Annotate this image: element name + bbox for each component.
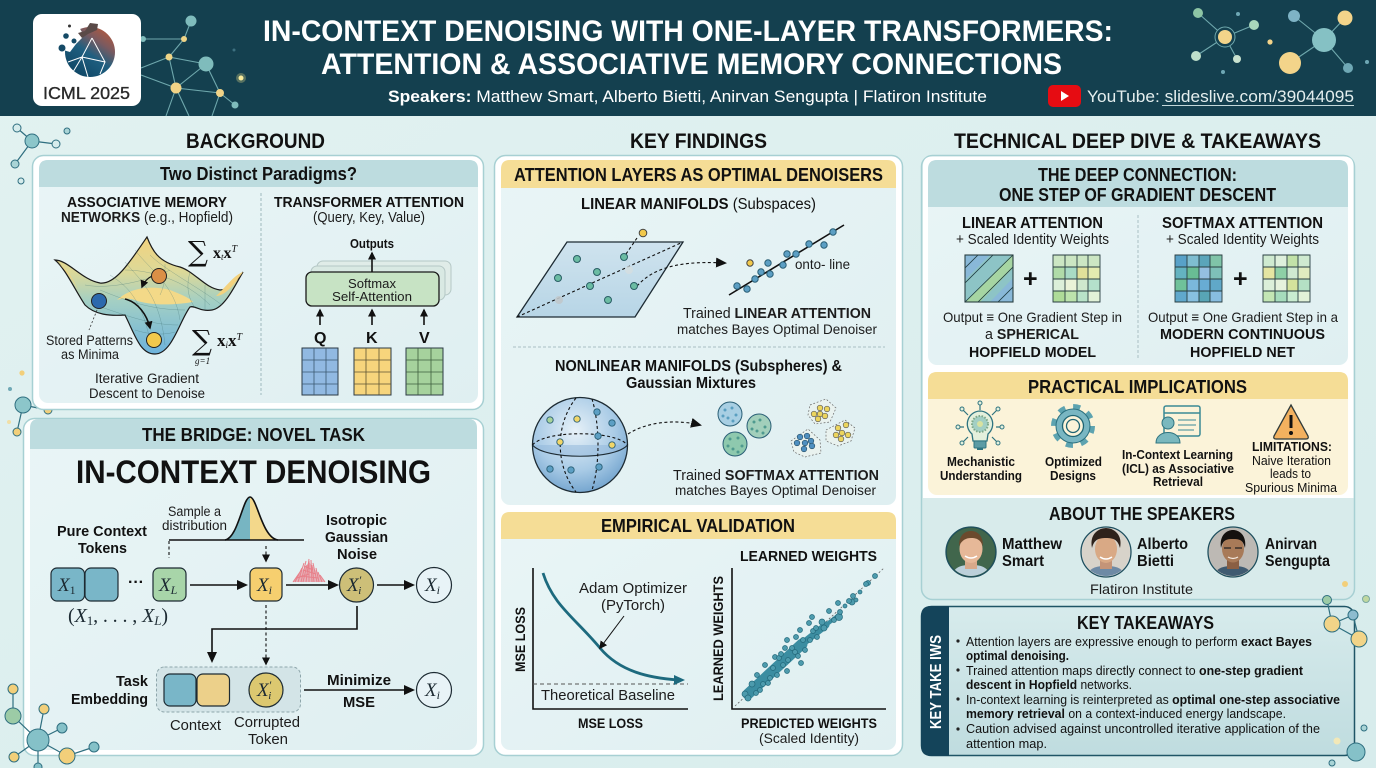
label: in-context learning: [1122, 448, 1234, 489]
formula: sum x x^T: [188, 235, 239, 268]
axis label: predicted weights: [741, 715, 877, 746]
label: gaussian noise: Noise: [337, 547, 377, 563]
formula: token tuple: 1: [87, 613, 93, 628]
label: mechanistic understanding: Mechanistic: [947, 455, 1015, 469]
token row: L: [170, 583, 178, 597]
section heading: deep connection: [999, 165, 1276, 205]
icon: context card: [1156, 406, 1200, 443]
plus sign: +: [1023, 265, 1038, 293]
diagram: self-attention: K: [366, 330, 378, 347]
bullet list: Trained attention maps directly connect to one-step gradient: [966, 663, 1304, 678]
speaker: alberto bietti: Bietti: [1137, 553, 1174, 570]
diagram: gaussian blobs: [718, 402, 771, 456]
output token: X: [425, 680, 437, 701]
icon: youtube: [1048, 85, 1081, 107]
label: pure context tokens: Tokens: [78, 541, 127, 557]
speaker: matthew smart: Matthew: [1002, 536, 1063, 553]
section heading: empirical validation: EMPIRICAL VALIDATION: [601, 516, 795, 536]
affiliation: Flatiron Institute: [1090, 581, 1193, 597]
title: IN-CONTEXT DENOISING WITH ONE-LAYER TRANSFORMERS:: [263, 15, 1113, 48]
header banner: [0, 0, 1376, 116]
label: gaussian noise: [325, 513, 388, 563]
formula: sum x x^T: t: [221, 252, 224, 262]
label: minimize mse: [327, 673, 391, 711]
conference logo: [33, 14, 141, 106]
youtube link: YouTube: slideslive.com/39044095: [1087, 88, 1354, 106]
plus sign: +: [1233, 265, 1248, 293]
caption: sample a distribution: Sample a: [168, 504, 221, 519]
heading: about the speakers: ABOUT THE SPEAKERS: [1049, 504, 1235, 524]
label: limitations: Naive Iteration: [1252, 454, 1331, 468]
chart: learned vs predicted scatter: [711, 549, 886, 746]
formula: sum x x^T: ∑: [188, 235, 208, 268]
matrix K: [354, 348, 391, 395]
axis label: predicted weights: (Scaled Identity): [759, 731, 859, 746]
label: corrupted token: [234, 715, 300, 748]
matrix: identity weights: [1263, 255, 1310, 302]
task embedding tokens: X: [257, 680, 269, 701]
task embedding tokens: [156, 667, 300, 712]
formula: token tuple: X: [142, 605, 154, 627]
bullet list: optimal denoising.: [966, 648, 1069, 663]
label: theoretical baseline: Theoretical Baseline: [541, 688, 675, 704]
diagram: sphere: [532, 398, 700, 492]
column: softmax attention: + Scaled Identity Weights: [1166, 232, 1319, 248]
heading: background: BACKGROUND: [186, 129, 325, 153]
associative memory title: ASSOCIATIVE MEMORY: [67, 195, 227, 211]
label: optimized designs: [1045, 455, 1102, 483]
sub-heading: nonlinear manifolds: Gaussian Mixtures: [626, 375, 756, 392]
sub-heading: nonlinear manifolds: [555, 358, 842, 392]
label: limitations: leads to: [1270, 467, 1311, 481]
caption: softmax attention: Trained SOFTMAX ATTENTION: [673, 468, 879, 484]
diagram: projection onto line: onto- line: [795, 256, 850, 272]
transformer attention title: (Query, Key, Value): [313, 210, 425, 226]
transformer attention title: TRANSFORMER ATTENTION: [274, 195, 464, 211]
caption: linear attention: Trained LINEAR ATTENTION: [683, 306, 871, 322]
label: mechanistic understanding: Understanding: [940, 469, 1022, 483]
panel: key takeaways: [921, 606, 1354, 756]
bullet list: descent in Hopfield networks.: [966, 677, 1132, 692]
label: corrupted token: Token: [248, 732, 288, 748]
decorative network right: [1191, 8, 1369, 74]
label: in-context learning: In-Context Learning: [1122, 448, 1233, 462]
chart: mse loss curve: [513, 568, 688, 731]
caption: linear attention: [677, 306, 877, 337]
formula: sum i=1 x x^T: ∑: [192, 324, 212, 357]
label: minimize mse: MSE: [343, 695, 375, 711]
column: softmax attention: Output ≡ One Gradient Step in a: [1148, 309, 1338, 325]
axis label: predicted weights: PREDICTED WEIGHTS: [741, 715, 877, 731]
speaker: matthew smart: [945, 527, 1063, 580]
diagram: projection onto line: [729, 225, 850, 295]
column: linear attention: Output ≡ One Gradient Step in: [943, 309, 1122, 325]
formula: sum i=1 x x^T: i: [226, 340, 228, 350]
section heading: attention layers: ATTENTION LAYERS AS OPTIMAL DENOISERS: [514, 165, 883, 185]
sub-heading: nonlinear manifolds: NONLINEAR MANIFOLDS (Subspheres) &: [555, 358, 842, 375]
speaker: alberto bietti: Alberto: [1137, 536, 1188, 553]
label: minimize mse: Minimize: [327, 673, 391, 689]
token row: 1: [70, 583, 76, 597]
output token: [416, 672, 452, 708]
task embedding tokens: ′: [269, 678, 272, 692]
caption: stored patterns: Stored Patterns: [46, 333, 133, 348]
token row: [51, 568, 452, 602]
caption: sample a distribution: [162, 504, 227, 533]
section heading: deep connection: ONE STEP OF GRADIENT DESCENT: [999, 185, 1276, 205]
transformer attention title: [274, 195, 464, 226]
heading: technical deep dive: TECHNICAL DEEP DIVE & TAKEAWAYS: [954, 129, 1321, 153]
speaker: anirvan sengupta: Anirvan: [1265, 536, 1317, 553]
speaker: anirvan sengupta: Sengupta: [1265, 553, 1330, 570]
annotation: adam optimizer: [579, 581, 687, 614]
token row: i: [437, 583, 440, 597]
bullet list: Attention layers are expressive enough to perform exact Bayes: [966, 634, 1312, 649]
decorative network right margin: [1322, 581, 1370, 766]
chart title: learned weights: LEARNED WEIGHTS: [740, 549, 877, 565]
panel heading: two paradigms: Two Distinct Paradigms?: [160, 164, 357, 184]
column: softmax attention: SOFTMAX ATTENTION: [1162, 215, 1323, 232]
formula: sum i=1 x x^T: g=1: [195, 356, 210, 366]
formula: token tuple: L: [153, 613, 161, 628]
icon: warning: [1274, 405, 1308, 439]
formula: token tuple: (X: [68, 605, 87, 627]
title: ATTENTION & ASSOCIATIVE MEMORY CONNECTIONS: [321, 48, 1062, 81]
token row: X: [58, 575, 70, 596]
diagram: cluster mixtures: [791, 399, 855, 457]
caption: stored patterns: [46, 333, 133, 362]
diagram: linear subspace plane: [517, 229, 725, 317]
label: task embedding: [71, 674, 149, 708]
caption: stored patterns: as Minima: [61, 347, 119, 362]
label: in-context learning: (ICL) as Associative: [1122, 462, 1234, 476]
column: softmax attention: MODERN CONTINUOUS: [1160, 327, 1325, 343]
bridge heading: THE BRIDGE: NOVEL TASK: [142, 425, 365, 445]
caption: gradient descent: Iterative Gradient: [95, 371, 199, 386]
heading: key findings: KEY FINDINGS: [630, 129, 767, 153]
token row: X: [425, 575, 437, 596]
label: pure context tokens: [57, 524, 147, 557]
decorative network top-left margin: [7, 124, 70, 436]
token row: i: [269, 583, 272, 597]
label: limitations: [1245, 440, 1337, 495]
bullet list: In-context learning is reinterpreted as optimal one-step associative: [966, 692, 1340, 707]
caption: gradient descent: [89, 371, 205, 401]
formula: token tuple: ): [161, 605, 168, 627]
matrix: identity weights: [1053, 255, 1100, 302]
title: [263, 15, 1113, 81]
token row: ′: [359, 573, 362, 587]
speaker: alberto bietti: [1080, 527, 1188, 580]
label: limitations: LIMITATIONS:: [1252, 440, 1332, 454]
column: softmax attention: [1148, 215, 1338, 361]
label: limitations: Spurious Minima: [1245, 481, 1337, 495]
column: linear attention: HOPFIELD MODEL: [969, 345, 1096, 361]
matrix: softmax: [1175, 255, 1222, 302]
decorative network bottom-left: [5, 684, 99, 768]
label: context: Context: [170, 718, 221, 734]
diagram: self-attention: Q: [314, 330, 326, 347]
formula: sum i=1 x x^T: x: [228, 331, 237, 350]
diagram: self-attention: Self-Attention: [332, 290, 412, 304]
token row: ···: [128, 574, 144, 591]
token row: i: [358, 585, 361, 597]
axis label: mse loss x: MSE LOSS: [578, 716, 643, 731]
bullet list: [956, 634, 1340, 751]
label: in-context learning: Retrieval: [1153, 475, 1203, 489]
formula: sum i=1 x x^T: [192, 324, 244, 366]
speaker: matthew smart: Smart: [1002, 553, 1044, 570]
diagram: self-attention: [306, 237, 451, 347]
energy landscape: [55, 237, 243, 354]
associative memory title: NETWORKS (e.g., Hopfield): [61, 210, 233, 226]
section heading: practical implications: PRACTICAL IMPLICATIONS: [1028, 377, 1247, 397]
distribution curve: [169, 497, 304, 561]
label: pure context tokens: Pure Context: [57, 524, 147, 540]
panel: the bridge: [24, 418, 484, 756]
output token: i: [437, 688, 440, 702]
bullet list: attention map.: [966, 736, 1047, 751]
noise burst: [293, 559, 325, 582]
label: optimized designs: Optimized: [1045, 455, 1102, 469]
matrix: linear diagonal: [965, 254, 1013, 302]
column: linear attention: LINEAR ATTENTION: [962, 215, 1103, 232]
axis label: learned weights: LEARNED WEIGHTS: [711, 576, 726, 701]
caption: linear attention: matches Bayes Optimal Denoiser: [677, 322, 877, 337]
column: linear attention: [943, 215, 1122, 361]
diagram: self-attention: Outputs: [350, 237, 394, 251]
caption: softmax attention: matches Bayes Optimal Denoiser: [675, 483, 876, 498]
icon: light bulb: [956, 401, 1004, 450]
matrix V: [406, 348, 443, 395]
panel: key findings: [494, 156, 902, 756]
label: gaussian noise: Isotropic: [326, 513, 387, 529]
token row: X: [347, 575, 359, 596]
label: mechanistic understanding: [940, 455, 1022, 483]
token row: X: [159, 575, 171, 596]
big title: IN-CONTEXT DENOISING: [76, 454, 431, 490]
task embedding tokens: i: [268, 690, 271, 702]
token row: X: [257, 575, 269, 596]
caption: sample a distribution: distribution: [162, 518, 227, 533]
takeaways heading: KEY TAKEAWAYS: [1077, 613, 1214, 633]
panel: background: [32, 156, 484, 410]
caption: softmax attention: [673, 468, 879, 498]
formula: sum i=1 x x^T: x: [217, 331, 226, 350]
decorative network left: [140, 16, 246, 116]
column: linear attention: a SPHERICAL: [985, 327, 1079, 343]
label: optimized designs: Designs: [1050, 469, 1096, 483]
column: softmax attention: HOPFIELD NET: [1190, 345, 1295, 361]
label: task embedding: Task: [116, 674, 149, 690]
column: linear attention: + Scaled Identity Weights: [956, 232, 1109, 248]
caption: gradient descent: Descent to Denoise: [89, 386, 205, 401]
flow arrows: [190, 585, 413, 690]
speakers line: Speakers: Matthew Smart, Alberto Bietti, Anirvan Sengupta | Flatiron Institute: [388, 88, 987, 106]
formula: sum x x^T: x: [224, 245, 232, 262]
formula: token tuple: , . . . ,: [93, 605, 137, 627]
formula: sum x x^T: T: [232, 244, 239, 255]
label: corrupted token: Corrupted: [234, 715, 300, 731]
annotation: adam optimizer: (PyTorch): [601, 598, 665, 614]
formula: sum i=1 x x^T: T: [237, 332, 244, 343]
bullet list: memory retrieval on a context-induced energy landscape.: [966, 706, 1286, 721]
speaker: anirvan sengupta: [1208, 527, 1330, 580]
axis label: mse loss y: MSE LOSS: [513, 607, 528, 672]
sub-heading: linear manifolds: LINEAR MANIFOLDS (Subspaces): [581, 196, 816, 213]
matrix Q: [302, 348, 338, 395]
label: task embedding: Embedding: [71, 692, 148, 708]
label: gaussian noise: Gaussian: [325, 530, 388, 546]
section heading: deep connection: THE DEEP CONNECTION:: [1038, 165, 1237, 185]
panel: technical deep dive: [922, 156, 1354, 600]
conference logo: ICML 2025: [43, 83, 130, 103]
icon: gear: [1054, 407, 1092, 445]
bullet list: Caution advised against uncontrolled iterative application of the: [966, 721, 1320, 736]
formula: sum x x^T: x: [213, 245, 221, 262]
diagram: self-attention: Softmax: [348, 277, 397, 291]
annotation: adam optimizer: Adam Optimizer: [579, 581, 687, 597]
associative memory title: [61, 195, 233, 226]
diagram: self-attention: V: [419, 330, 430, 347]
side tab label: KEY TAKE IWS: [928, 635, 945, 729]
